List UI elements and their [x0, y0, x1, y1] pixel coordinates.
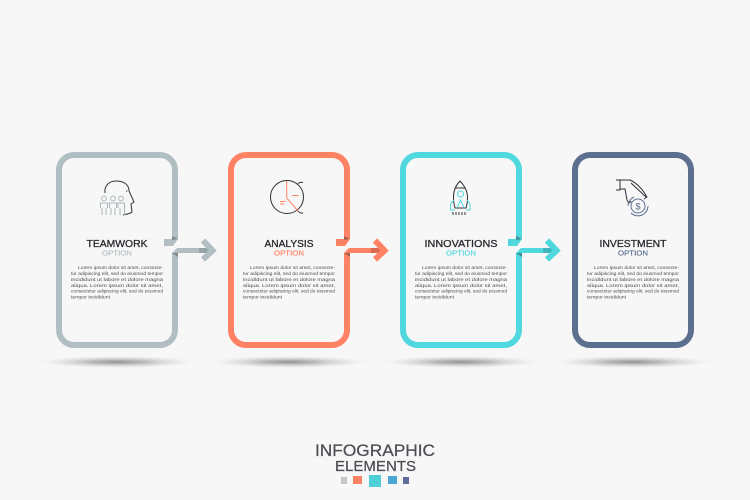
body text: aliqua. Lorem ipsum dolor sit amet, — [415, 283, 507, 288]
body text: Lorem ipsum dolor sit amet, consecte- — [594, 265, 679, 270]
title: ELEMENTS — [335, 458, 416, 475]
arrow — [164, 236, 212, 260]
body text — [587, 265, 679, 300]
icon: hand with coin — [616, 180, 648, 216]
arrow — [508, 236, 556, 260]
card shadow — [377, 356, 545, 368]
body text — [243, 265, 335, 300]
card outline — [59, 155, 175, 345]
title — [315, 442, 435, 475]
body text: incididunt ut labore et dolore magna — [415, 277, 507, 282]
card shadow — [33, 356, 201, 368]
body text: incididunt ut labore et dolore magna — [71, 277, 163, 282]
legend squares — [341, 475, 409, 487]
body text: tur adipiscing elit, sed do eiusmod tempor — [71, 271, 163, 276]
card outline — [403, 155, 519, 345]
card shadow — [205, 356, 373, 368]
arrow — [336, 236, 384, 260]
label: option: OPTION — [446, 248, 476, 258]
heading: innovations: INNOVATIONS — [424, 239, 498, 250]
label: option: OPTION — [618, 248, 648, 258]
body text: tempor incididunt — [587, 294, 627, 300]
body text: tur adipiscing elit, sed do eiusmod tempor — [587, 271, 679, 276]
body text: tur adipiscing elit, sed do eiusmod tempor — [243, 271, 335, 276]
title: INFOGRAPHIC — [315, 442, 435, 460]
body text: incididunt ut labore et dolore magna — [243, 277, 335, 282]
label: option: OPTION — [274, 248, 304, 258]
body text: aliqua. Lorem ipsum dolor sit amet, — [587, 283, 679, 288]
body text: Lorem ipsum dolor sit amet, consecte- — [78, 265, 163, 270]
heading: analysis: ANALYSIS — [264, 239, 314, 250]
body text: consectetur adipiscing elit, sed do eiusmod — [243, 288, 335, 294]
body text: consectetur adipiscing elit, sed do eiusmod — [415, 288, 507, 294]
icon: rocket — [450, 181, 470, 215]
body text: Lorem ipsum dolor sit amet, consecte- — [422, 265, 507, 270]
body text: tempor incididunt — [415, 294, 455, 300]
icon: head with team — [100, 181, 134, 215]
panel: investment — [549, 155, 717, 368]
panel: teamwork — [33, 155, 212, 368]
panel: innovations — [377, 155, 556, 368]
card shadow — [549, 356, 717, 368]
body text — [415, 265, 507, 300]
body text: consectetur adipiscing elit, sed do eiusmod — [587, 288, 679, 294]
label: option: OPTION — [102, 248, 132, 258]
body text — [71, 265, 163, 300]
heading: teamwork: TEAMWORK — [86, 239, 148, 250]
body text: aliqua. Lorem ipsum dolor sit amet, — [243, 283, 335, 288]
card outline — [231, 155, 347, 345]
card outline — [575, 155, 691, 345]
body text: aliqua. Lorem ipsum dolor sit amet, — [71, 283, 163, 288]
body text: Lorem ipsum dolor sit amet, consecte- — [250, 265, 335, 270]
body text: consectetur adipiscing elit, sed do eiusmod — [71, 288, 163, 294]
heading: investment: INVESTMENT — [600, 239, 666, 250]
coin symbol: $ — [635, 202, 641, 212]
icon: pie clock — [270, 180, 304, 214]
body text: tur adipiscing elit, sed do eiusmod tempor — [415, 271, 507, 276]
body text: tempor incididunt — [71, 294, 111, 300]
panel: analysis — [205, 155, 384, 368]
body text: tempor incididunt — [243, 294, 283, 300]
body text: incididunt ut labore et dolore magna — [587, 277, 679, 282]
